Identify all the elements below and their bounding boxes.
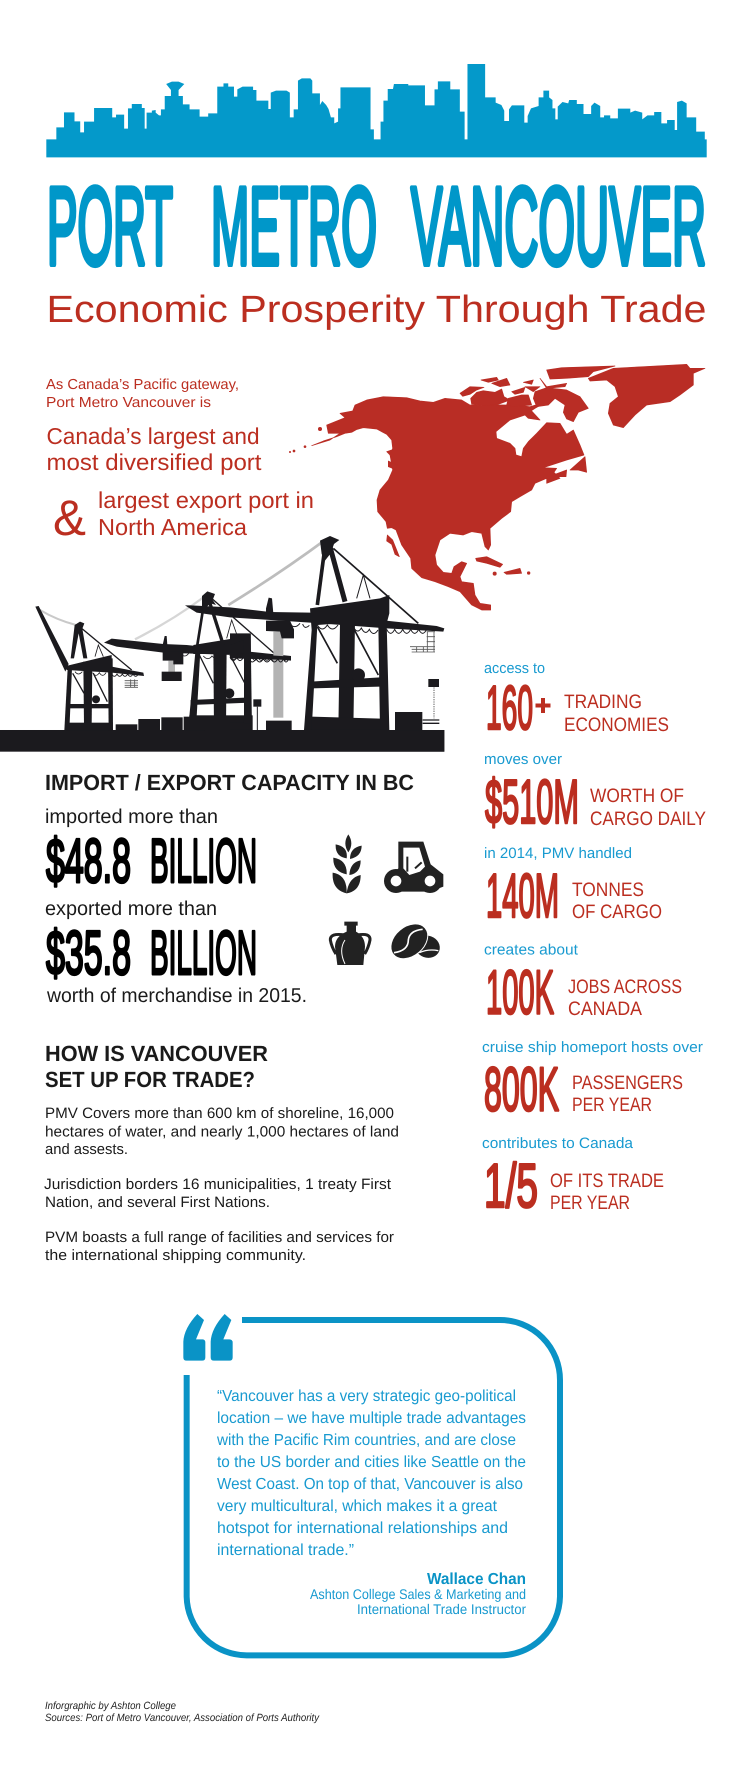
footer credits: Inforgraphic by Ashton College — [45, 1700, 176, 1712]
intro text: most diversified port — [46, 449, 262, 475]
crane middle — [104, 591, 291, 730]
import export figures: $48.8 — [46, 827, 131, 896]
intro text: & — [53, 490, 86, 546]
body text: PVM boasts a full range of facilities and services for — [45, 1229, 394, 1246]
stat: jobs — [484, 942, 682, 1028]
body text: PMV Covers more than 600 km of shoreline, 16,000 — [45, 1105, 394, 1122]
icon: jug — [330, 922, 370, 965]
intro text: Port Metro Vancouver is — [46, 395, 211, 411]
stat: daily cargo value: WORTH OF — [590, 785, 684, 807]
stat: trading economies: 160 — [486, 674, 533, 743]
quote frame — [187, 1320, 560, 1655]
stat: share of trade: OF ITS TRADE — [550, 1170, 664, 1192]
section: how is Vancouver set up heading: SET UP FOR TRADE? — [45, 1067, 255, 1092]
quote attribution — [310, 1571, 526, 1617]
map of North America — [289, 364, 705, 610]
intro text: largest export port in — [98, 487, 314, 513]
subtitle: Economic Prosperity Through Trade — [46, 289, 706, 331]
stat: tonnes of cargo: 140M — [486, 862, 559, 931]
intro text: Canada’s largest and — [46, 423, 260, 449]
intro text: As Canada’s Pacific gateway, — [46, 377, 239, 393]
stat: tonnes of cargo — [484, 845, 662, 931]
stat: daily cargo value: moves over — [484, 751, 562, 768]
quote text: international trade.” — [217, 1542, 354, 1559]
body text: Jurisdiction borders 16 municipalities, 1 treaty First — [44, 1176, 392, 1193]
stat: cruise passengers: 800K — [484, 1056, 559, 1124]
quote text: location – we have multiple trade advantages — [217, 1410, 526, 1427]
crane right and dock equipment — [185, 536, 444, 752]
icon: quotation mark — [183, 1314, 233, 1361]
quote attribution: Wallace Chan — [427, 1571, 526, 1588]
import export figures: $35.8 — [46, 919, 131, 988]
stat: trading economies: ECONOMIES — [564, 714, 669, 736]
icon: tractor — [384, 842, 443, 893]
quote attribution: International Trade Instructor — [357, 1601, 526, 1617]
stat: trading economies — [484, 660, 669, 743]
skyline illustration — [46, 64, 707, 157]
body text — [44, 1105, 399, 1264]
quote text: “Vancouver has a very strategic geo-political — [217, 1388, 516, 1405]
stat: jobs: 100K — [486, 958, 554, 1028]
title — [47, 165, 706, 288]
quote text: very multicultural, which makes it a great — [217, 1498, 498, 1515]
intro text: North America — [98, 514, 247, 540]
stat: share of trade: 1/5 — [484, 1152, 538, 1221]
stat: share of trade: PER YEAR — [550, 1192, 630, 1214]
stat: jobs: creates about — [484, 942, 579, 958]
section: how is Vancouver set up heading: HOW IS VANCOUVER — [45, 1041, 268, 1066]
stat: share of trade — [482, 1135, 664, 1221]
stat: daily cargo value — [484, 751, 706, 837]
intro text — [46, 377, 314, 546]
stat: cruise passengers — [482, 1039, 703, 1124]
icon: coffee beans — [384, 917, 443, 966]
stat: jobs: JOBS ACROSS — [568, 976, 682, 998]
title: PORT — [47, 165, 173, 288]
import export figures: worth of merchandise in 2015. — [46, 985, 307, 1007]
crane left — [35, 606, 144, 731]
body text: hectares of water, and nearly 1,000 hectares of land — [45, 1124, 399, 1140]
quote attribution: Ashton College Sales & Marketing and — [310, 1586, 526, 1602]
section: import export heading: IMPORT / EXPORT CAPACITY IN BC — [45, 770, 414, 795]
icon: wheat — [333, 834, 362, 893]
section: how is Vancouver set up heading — [45, 1041, 268, 1092]
stat: trading economies: TRADING — [564, 691, 642, 713]
stat: trading economies: access to — [484, 660, 545, 677]
stat: cruise passengers: PER YEAR — [572, 1094, 652, 1116]
import export figures: exported more than — [45, 898, 217, 920]
import export figures: BILLION — [150, 919, 257, 988]
title: METRO — [211, 165, 377, 288]
stat: daily cargo value: CARGO DAILY — [590, 808, 706, 830]
quote text: hotspot for international relationships and — [217, 1520, 508, 1537]
stat: tonnes of cargo: OF CARGO — [572, 901, 662, 923]
quote text — [216, 1388, 526, 1559]
body text: and assests. — [45, 1141, 128, 1158]
ground and containers — [0, 717, 444, 752]
stat: cruise passengers: PASSENGERS — [572, 1072, 683, 1094]
import export figures: BILLION — [150, 827, 257, 896]
stat: jobs: CANADA — [568, 998, 642, 1020]
crane and port silhouette — [0, 536, 444, 752]
stat: cruise passengers: cruise ship homeport hosts over — [482, 1039, 703, 1056]
import export figures — [45, 806, 307, 1007]
body text: the international shipping community. — [45, 1247, 306, 1264]
quote text: West Coast. On top of that, Vancouver is also — [217, 1476, 523, 1493]
footer credits — [45, 1700, 320, 1724]
import export figures: imported more than — [45, 806, 218, 828]
stat: tonnes of cargo: in 2014, PMV handled — [484, 845, 632, 862]
footer credits: Sources: Port of Metro Vancouver, Association of Ports Authority — [45, 1712, 320, 1724]
stat: share of trade: contributes to Canada — [482, 1135, 634, 1152]
quote text: with the Pacific Rim countries, and are close — [216, 1432, 516, 1449]
stat: tonnes of cargo: TONNES — [572, 879, 644, 901]
stat: daily cargo value: $510M — [485, 768, 579, 837]
body text: Nation, and several First Nations. — [45, 1194, 270, 1211]
quote text: to the US border and cities like Seattle on the — [217, 1454, 526, 1471]
